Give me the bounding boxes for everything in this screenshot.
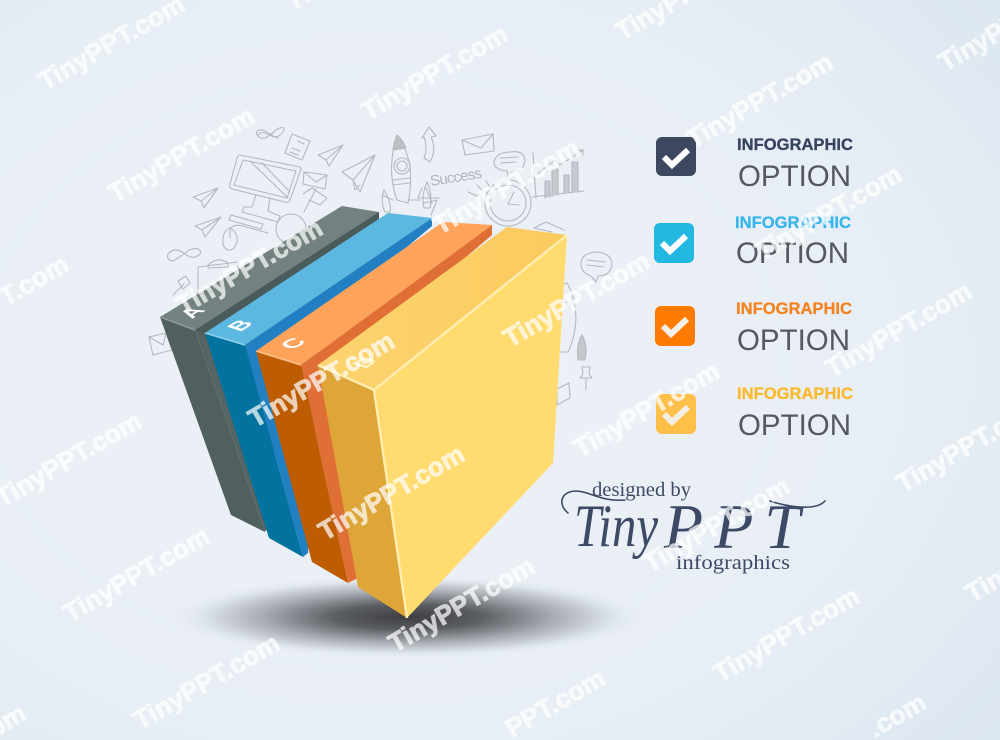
watermarks: TinyPPT.com (568, 355, 725, 463)
icon: mouse (223, 225, 268, 250)
icon: rocket right (558, 283, 576, 352)
icon: navy checkbox (656, 137, 696, 176)
watermarks: TinyPPT.com (243, 325, 400, 433)
icon: envelope right (462, 134, 494, 155)
icon: yellow checkbox (656, 394, 696, 434)
icon: envelope (303, 172, 327, 189)
icon: push pin (303, 188, 327, 212)
label: OPTION (738, 409, 851, 442)
icon: small pin left (173, 276, 190, 295)
icon: bar chart (532, 150, 584, 198)
option 2 (654, 213, 851, 270)
logo line: designed by: designed by (592, 479, 691, 501)
watermarks: TinyPPT.com (498, 245, 655, 353)
icon: clock (468, 180, 531, 226)
heading: INFOGRAPHIC (737, 135, 853, 154)
icon: rocket (382, 135, 431, 212)
watermarks: TinyPPT.com (356, 18, 513, 126)
watermarks: TinyPPT.com (708, 580, 865, 688)
icon: infinity left (168, 249, 201, 261)
icon: booster (578, 335, 586, 360)
block C orange (256, 222, 492, 583)
icon: small plane (318, 145, 343, 166)
icon: plane left lower (195, 217, 221, 237)
letter D: D (346, 354, 384, 370)
watermarks: TinyPPT.com (750, 158, 907, 266)
option 1 (656, 135, 853, 193)
icon: large paper plane (342, 155, 375, 192)
icon: cyan checkbox (654, 223, 694, 263)
label: success: Success (429, 165, 483, 190)
icon: infinity top (256, 128, 284, 138)
legend (654, 135, 853, 442)
heading: INFOGRAPHIC (736, 299, 852, 318)
block D yellow (318, 227, 567, 618)
option 4 (656, 384, 853, 442)
logo swashes (562, 491, 825, 513)
watermarks: TinyPPT.com (638, 470, 795, 578)
logo (562, 479, 825, 574)
watermarks: TinyPPT.com (171, 212, 328, 320)
letter A: A (173, 304, 211, 320)
icon: small box top (534, 222, 564, 232)
watermarks: TinyPPT.com (313, 438, 470, 546)
icon: monitor (229, 155, 301, 229)
label: OPTION (738, 160, 851, 193)
logo script: PPT: PPT (663, 491, 804, 562)
icon: curved arrow (422, 127, 436, 162)
icon: speech bubble right (581, 252, 612, 282)
watermarks: TinyPPT.com (383, 550, 540, 658)
icon: speech bubble (494, 152, 525, 176)
watermarks: TinyPPT.com (681, 46, 838, 154)
watermarks: TinyPPT.com (820, 275, 977, 383)
icon: plane left upper (193, 188, 218, 208)
icon: no sign (276, 214, 306, 244)
letter B: B (221, 317, 259, 333)
watermarks: TinyPPT.com (428, 132, 585, 240)
icon: box (557, 383, 570, 405)
doodle icons cluster (149, 127, 612, 405)
ground shadow (168, 575, 648, 659)
option 3 (655, 299, 852, 357)
logo script: Tiny: Tiny (574, 493, 658, 559)
block B blue (205, 213, 432, 557)
icon: envelope left (149, 333, 172, 355)
block A grey (160, 206, 379, 532)
watermarks: TinyPPT.com (58, 520, 215, 628)
letter C: C (274, 335, 312, 351)
logo line: infographics: infographics (676, 552, 790, 574)
heading: INFOGRAPHIC (735, 213, 851, 232)
3D book stack (160, 206, 567, 618)
icon: pin right (580, 367, 592, 390)
icon: note (285, 134, 310, 160)
icon: orange checkbox (655, 306, 695, 346)
heading: INFOGRAPHIC (737, 384, 853, 403)
label: OPTION (736, 237, 849, 270)
watermarks: TinyPPT.com (103, 100, 260, 208)
watermarks: TinyPPT.com (128, 627, 285, 735)
icon: pin center (418, 188, 440, 215)
icon: clipboard (198, 260, 240, 312)
label: OPTION (737, 324, 850, 357)
